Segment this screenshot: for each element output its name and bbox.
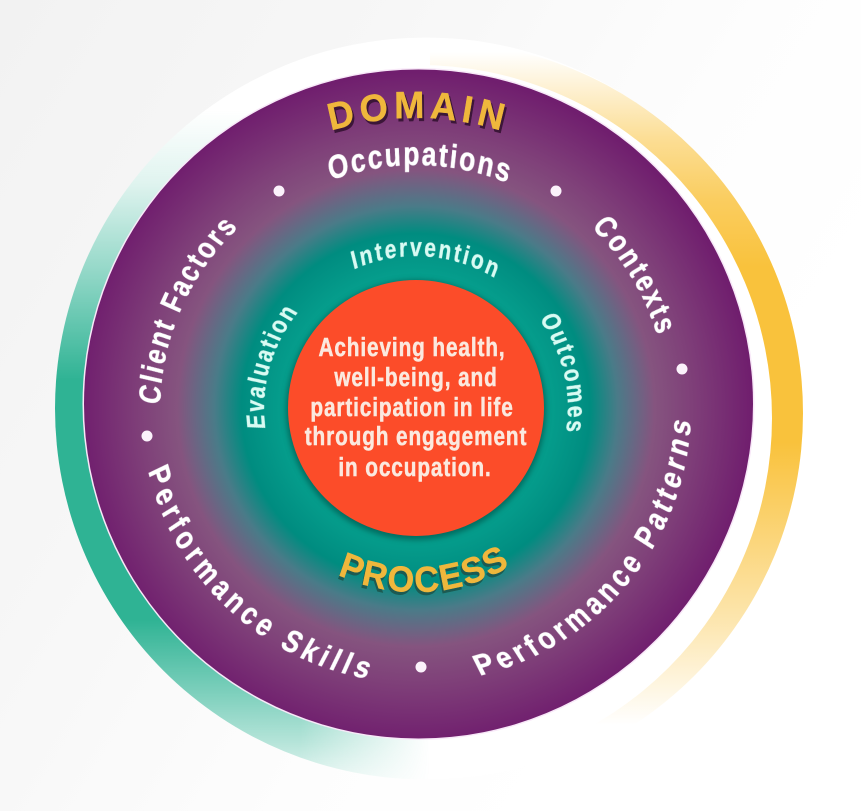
label: Intervention: Intervention [350, 242, 498, 278]
label: Performance Patterns: Performance Patterns [472, 420, 691, 676]
center statement [305, 333, 527, 482]
label: Evaluation: Evaluation [246, 307, 298, 428]
center statement: well-being, and [333, 363, 498, 392]
green crescent [55, 128, 416, 778]
heading: DOMAIN: DOMAIN [327, 92, 505, 130]
center statement: through engagement [305, 422, 527, 451]
white gap ring [66, 65, 772, 771]
gold crescent [430, 58, 803, 714]
label: Outcomes: Outcomes [542, 314, 582, 432]
label: Performance Skills: Performance Skills [148, 464, 370, 678]
center circle [288, 280, 544, 536]
heading: PROCESS: PROCESS [339, 547, 507, 592]
center circle shadow [286, 280, 546, 540]
white halo disc [55, 38, 797, 780]
center statement: in occupation. [338, 453, 492, 482]
domain disc [82, 68, 754, 740]
heading: DOMAIN: DOMAIN [334, 94, 507, 134]
label: Client Factors: Client Factors [138, 220, 236, 404]
heading: DOMAIN [327, 92, 507, 134]
separator dots [142, 186, 688, 672]
center statement: Achieving health, [318, 333, 506, 362]
heading: PROCESS: PROCESS [338, 552, 506, 596]
label: Contexts: Contexts [595, 216, 672, 334]
center statement: participation in life [310, 393, 514, 422]
label: Occupations: Occupations [328, 143, 510, 182]
